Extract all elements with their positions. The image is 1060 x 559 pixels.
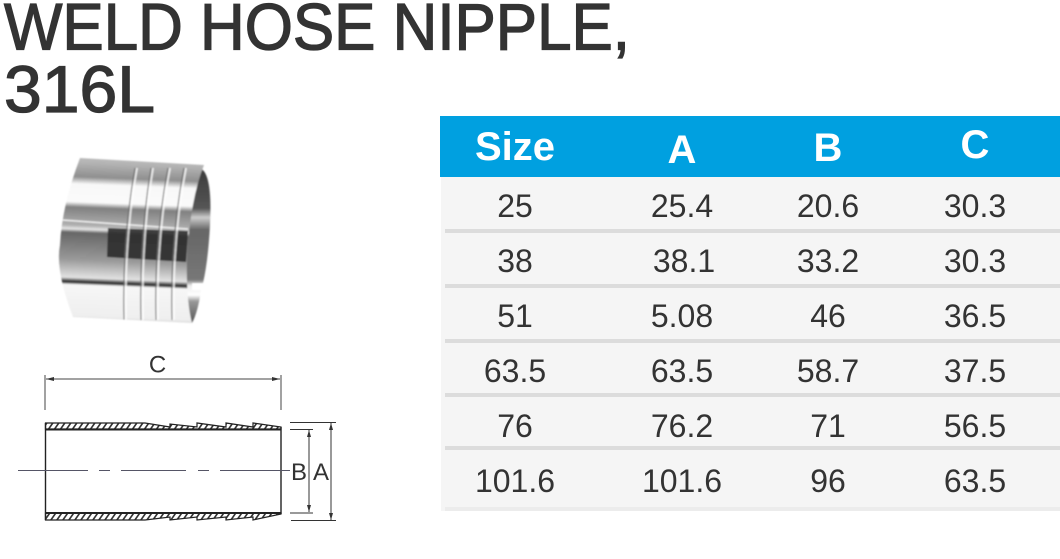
row 25 (497, 188, 1006, 224)
row 63.5: 37.5 (944, 353, 1006, 389)
row 101.6: 63.5 (944, 463, 1006, 499)
row 25: 25.4 (651, 188, 713, 224)
dimension A (290, 422, 336, 520)
row 76: 71 (810, 408, 846, 444)
row 25: 20.6 (797, 188, 859, 224)
row 51: 36.5 (944, 298, 1006, 334)
technical drawing: section with dimensions (18, 352, 336, 520)
row 25: 25 (497, 188, 533, 224)
row 38: 33.2 (797, 243, 859, 279)
dimension C: C (149, 352, 166, 378)
row 38: 38.1 (653, 243, 715, 279)
row 51 (497, 298, 1006, 334)
row 76: 76 (497, 408, 533, 444)
table header: B (814, 126, 842, 170)
dimension A: A (313, 459, 329, 486)
table header: Size (475, 125, 555, 169)
dimension B: B (291, 459, 307, 486)
row 38: 38 (497, 243, 533, 279)
row 76: 76.2 (651, 408, 713, 444)
centre line (18, 470, 290, 472)
row 25: 30.3 (944, 188, 1006, 224)
table (440, 116, 1060, 511)
row 51: 46 (810, 298, 846, 334)
row 51: 5.08 (651, 298, 713, 334)
row 76 (497, 408, 1006, 444)
table body background (441, 177, 1060, 511)
dimension B (290, 430, 313, 513)
row 38: 30.3 (944, 243, 1006, 279)
row 63.5: 63.5 (651, 353, 713, 389)
row 101.6: 101.6 (642, 463, 722, 499)
row 63.5 (484, 353, 1006, 389)
row separators (445, 229, 1060, 511)
product photo: hose nipple (58, 157, 212, 324)
row 101.6: 101.6 (475, 463, 555, 499)
row 63.5: 63.5 (484, 353, 546, 389)
title (4, 0, 630, 126)
title: 316L (4, 52, 155, 126)
table header (440, 116, 1060, 177)
row 51: 51 (497, 298, 533, 334)
row 101.6: 96 (810, 463, 846, 499)
row 63.5: 58.7 (797, 353, 859, 389)
nipple section (46, 423, 281, 520)
table header: A (668, 128, 696, 172)
table header: C (961, 123, 989, 167)
row 101.6 (475, 463, 1006, 499)
row 38 (497, 243, 1006, 279)
row 76: 56.5 (944, 408, 1006, 444)
dimension C (45, 352, 281, 410)
